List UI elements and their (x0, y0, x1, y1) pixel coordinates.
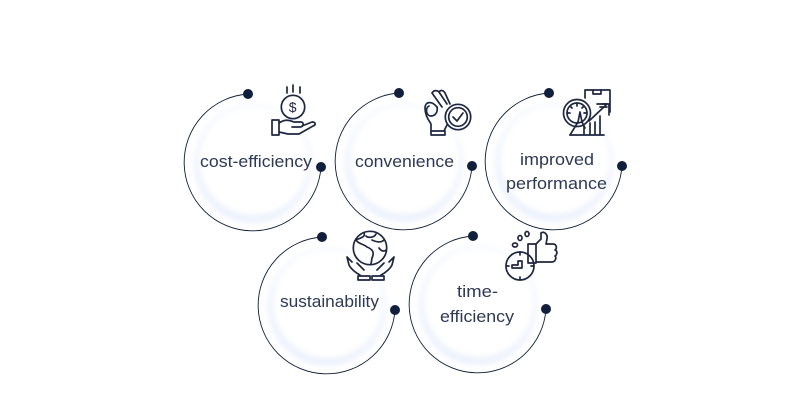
label: sustainability: sustainability (280, 293, 380, 311)
panel: sustainability (258, 231, 400, 374)
panel: improved performance (485, 88, 627, 230)
panel: improved performance: performance (506, 175, 607, 193)
panel: convenience (335, 88, 477, 230)
panel: time-efficiency: efficiency (440, 308, 515, 326)
icon: hands holding globe (347, 231, 394, 280)
icon: stopwatch and thumbs up (506, 232, 557, 280)
label: cost-efficiency: cost-efficiency (200, 153, 313, 171)
label: convenience: convenience (355, 153, 454, 171)
label: time-efficiency: time- (457, 283, 498, 301)
label: improved performance: improved (520, 151, 594, 169)
icon: hand holding coin: $ (289, 99, 297, 115)
icon: gauge, parcel and growth chart (564, 90, 610, 135)
icon: hand holding coin (272, 85, 315, 135)
icon: OK hand with check badge (425, 90, 471, 135)
panel: cost-efficiency (184, 85, 326, 231)
panel: time-efficiency (409, 231, 557, 373)
